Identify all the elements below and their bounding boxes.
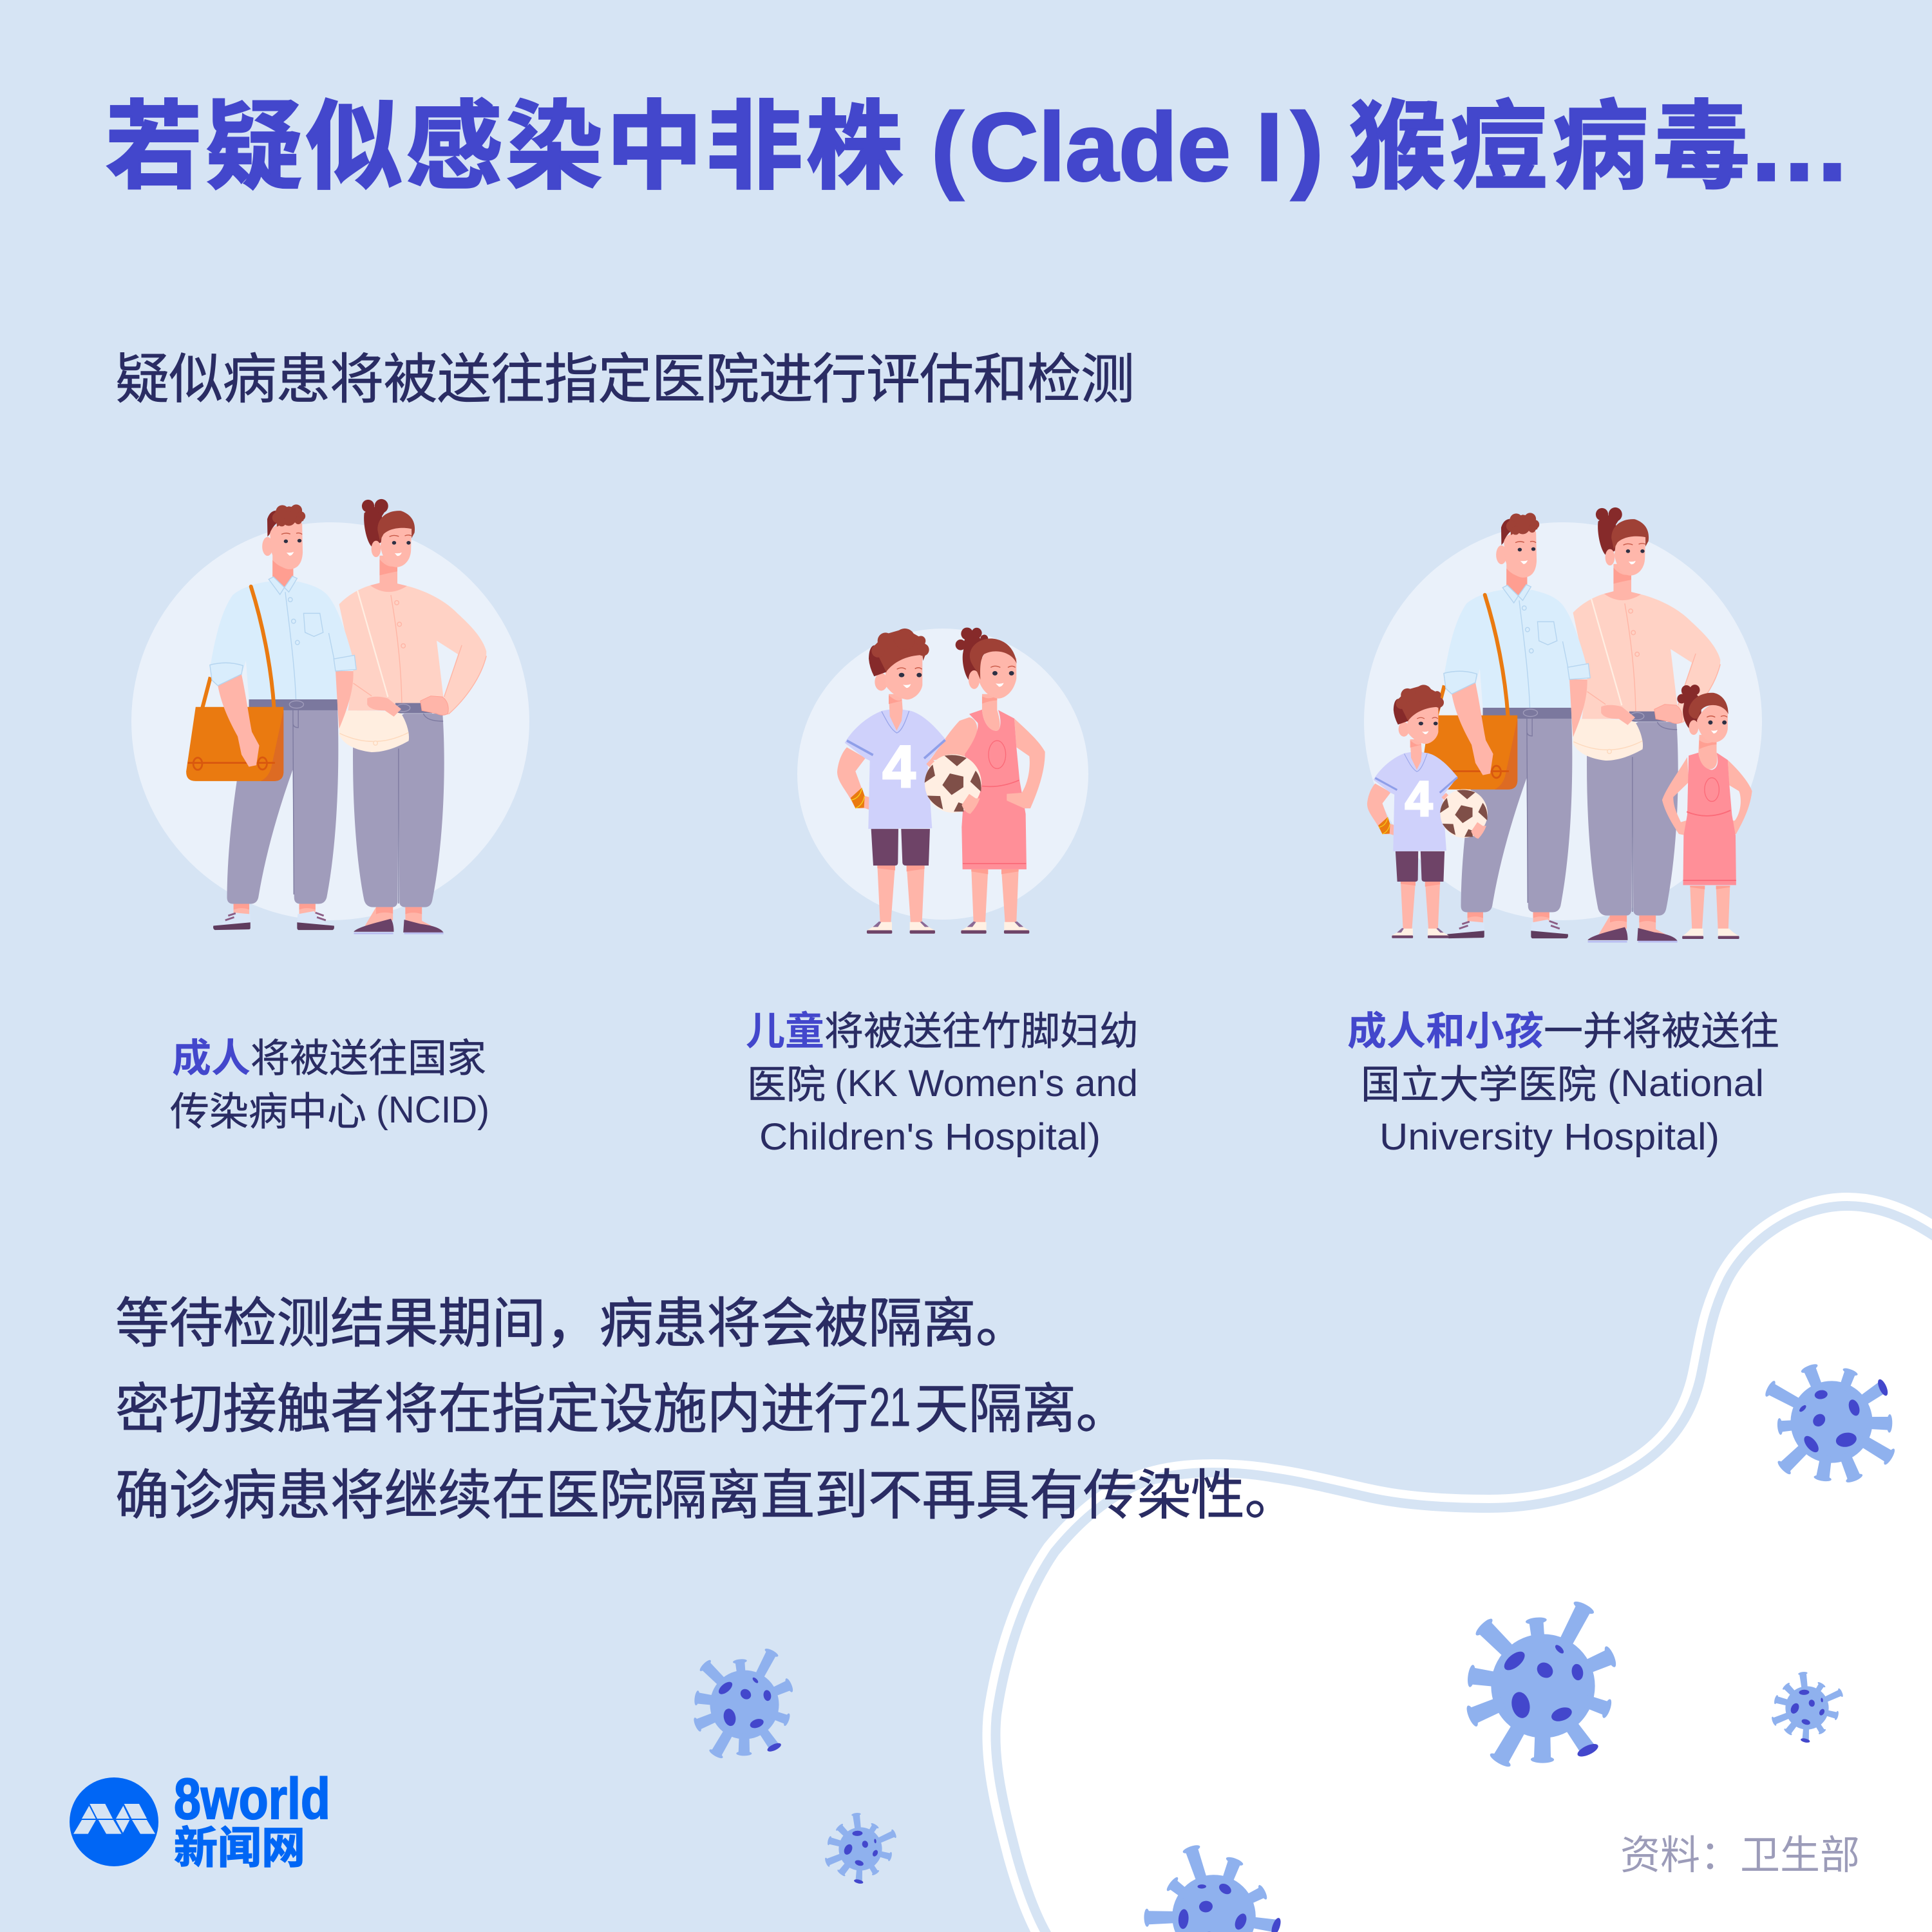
caption: children: 将被送往竹脚妇幼 bbox=[824, 1009, 1139, 1053]
title: ... bbox=[1751, 82, 1850, 204]
title: Clade bbox=[969, 93, 1231, 201]
family boy jersey number: 4 bbox=[1405, 772, 1433, 827]
illustration: family panel bbox=[1364, 507, 1762, 942]
body text: 21 bbox=[869, 1377, 911, 1437]
caption: adults: 传染病中心 bbox=[170, 1090, 366, 1133]
title: I bbox=[1256, 93, 1283, 201]
logo: 8world: 新闻网 bbox=[174, 1824, 305, 1873]
logo: 8world bbox=[70, 1767, 330, 1873]
caption: adults: 将被送往国家 bbox=[251, 1036, 486, 1080]
subheading: 疑似病患将被送往指定医院进行评估和检测 bbox=[115, 349, 1135, 410]
virus icon: top right bbox=[1762, 1361, 1898, 1485]
virus icon: left medium bbox=[692, 1647, 794, 1760]
white blob with outline band bbox=[1000, 1211, 1932, 1932]
body text bbox=[115, 1293, 1298, 1526]
title: ) bbox=[1291, 93, 1323, 201]
title: 若疑似感染中非株 bbox=[106, 93, 903, 201]
caption: family: 成人和小孩 bbox=[1347, 1009, 1544, 1053]
caption: family: (National bbox=[1607, 1063, 1764, 1104]
body text: 天隔离。 bbox=[914, 1379, 1130, 1439]
caption: family bbox=[1347, 1009, 1779, 1158]
caption: adults bbox=[170, 1036, 489, 1133]
caption: children: 医院 bbox=[747, 1063, 826, 1106]
caption: children bbox=[746, 1009, 1139, 1158]
caption: family: 一并将被送往 bbox=[1544, 1009, 1779, 1053]
body text: 确诊病患将继续在医院隔离直到不再具有传染性。 bbox=[115, 1465, 1298, 1526]
caption: children: 儿童 bbox=[746, 1009, 824, 1053]
caption: family: 国立大学医院 bbox=[1361, 1063, 1596, 1106]
family girl bbox=[1662, 685, 1752, 939]
body text: 等待检测结果期间，病患将会被隔离。 bbox=[115, 1293, 1030, 1354]
title bbox=[106, 82, 1850, 204]
caption: family: University Hospital) bbox=[1379, 1116, 1719, 1158]
title: ( bbox=[931, 93, 963, 201]
caption: adults: (NCID) bbox=[376, 1089, 489, 1131]
virus icon: bottom cropped bbox=[1120, 1824, 1304, 1932]
body text: 密切接触者将在指定设施内进行 bbox=[115, 1379, 868, 1439]
logo: 8world: 8world bbox=[174, 1767, 330, 1832]
virus icon: left small bbox=[813, 1800, 907, 1895]
illustration: children panel bbox=[797, 627, 1088, 934]
source: 资料：卫生部 bbox=[1620, 1833, 1860, 1878]
virus icon: small right bbox=[1760, 1659, 1854, 1754]
caption: children: Children's Hospital) bbox=[759, 1116, 1101, 1158]
virus icon: large centre bbox=[1464, 1599, 1618, 1769]
jersey number: 4 bbox=[882, 734, 916, 800]
caption: children: (KK Women's and bbox=[835, 1063, 1138, 1104]
caption: adults: 成人 bbox=[172, 1036, 251, 1080]
title: 猴痘病毒 bbox=[1349, 93, 1750, 201]
illustration: adults panel bbox=[131, 499, 529, 933]
